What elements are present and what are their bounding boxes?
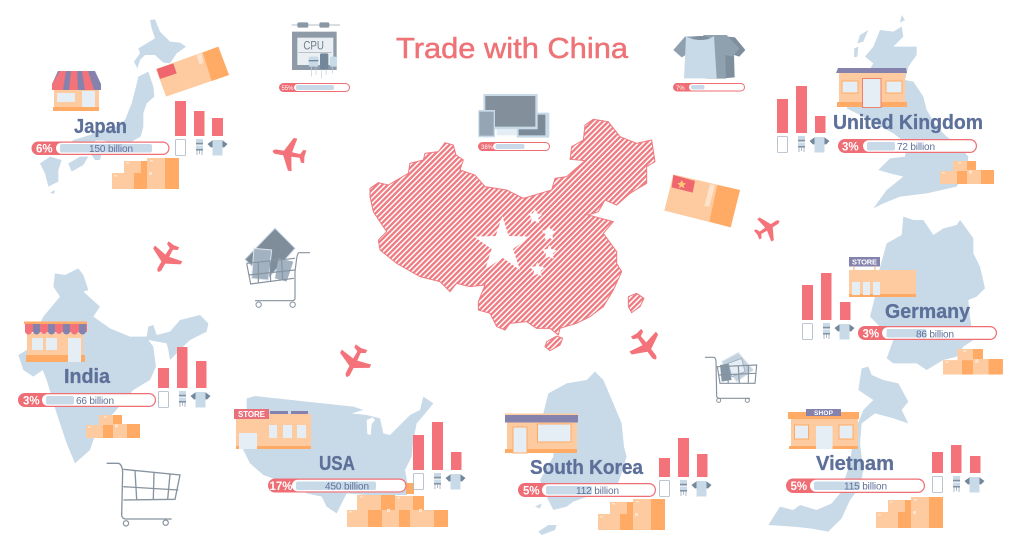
map: UK bbox=[847, 15, 968, 208]
icon: t-shirts bbox=[673, 35, 745, 79]
panel: Germany bbox=[802, 217, 1003, 375]
map: USA bbox=[240, 396, 433, 513]
icon: boxes bbox=[598, 499, 665, 530]
pill: share and value bbox=[268, 478, 406, 493]
icon: CPU: CPU bbox=[303, 38, 324, 52]
map: South Korea bbox=[535, 372, 627, 535]
map: Japan bbox=[40, 19, 186, 194]
bar chart bbox=[175, 101, 228, 156]
icon: small full shopping cart bbox=[705, 353, 757, 402]
pill: share and value: 3% bbox=[842, 142, 859, 154]
pill: share and value bbox=[786, 478, 925, 493]
icon: shop: SHOP bbox=[814, 410, 834, 417]
name: South Korea bbox=[530, 457, 644, 479]
title: Trade with China bbox=[396, 33, 629, 65]
icon: carton with flag bbox=[664, 174, 740, 227]
icon: plane bbox=[270, 135, 308, 173]
pill: share and value: 3% bbox=[862, 328, 879, 340]
icon: shop bbox=[836, 68, 907, 108]
icon: empty shopping cart bbox=[107, 463, 180, 526]
pill: share and value: 150 billion bbox=[89, 144, 133, 155]
panel: United Kingdom bbox=[777, 15, 994, 208]
icon: store: STORE bbox=[852, 258, 877, 266]
panel: USA bbox=[234, 396, 466, 527]
panel: India bbox=[18, 268, 210, 463]
icon: shop bbox=[788, 409, 859, 449]
icon: boxes bbox=[940, 161, 994, 184]
panel: Japan bbox=[32, 19, 229, 194]
icon: boxes bbox=[112, 158, 179, 189]
pill: share and value bbox=[32, 142, 170, 156]
bar chart bbox=[413, 422, 466, 490]
icon: boxes bbox=[86, 415, 140, 438]
pill: apparel share: 7% bbox=[676, 86, 685, 92]
icon: shop bbox=[505, 414, 578, 453]
map: India bbox=[18, 268, 208, 463]
icon: store bbox=[234, 409, 311, 449]
map: China with flag stars bbox=[370, 119, 655, 351]
name: Germany bbox=[885, 301, 971, 323]
icon: boxes bbox=[876, 497, 943, 528]
pill: share and value bbox=[18, 393, 156, 408]
pill: share and value: 115 billion bbox=[844, 482, 887, 492]
icon: full shopping cart bbox=[245, 228, 310, 307]
name: United Kingdom bbox=[833, 112, 983, 134]
icon: plane bbox=[623, 323, 669, 369]
name: Japan bbox=[74, 116, 127, 138]
panel: Vietnam bbox=[768, 367, 984, 532]
bar chart bbox=[777, 86, 830, 152]
pill: electronics share: 38% bbox=[481, 145, 494, 151]
pill: share and value bbox=[838, 139, 977, 154]
pill: electronics share bbox=[478, 142, 550, 151]
pill: share and value: 3% bbox=[23, 396, 40, 408]
bar chart bbox=[932, 445, 984, 492]
icon: store: STORE bbox=[238, 410, 266, 419]
pill: share and value: 6% bbox=[36, 144, 53, 156]
pill: CPU share bbox=[279, 83, 350, 92]
pill: share and value: 72 billion bbox=[897, 142, 935, 153]
name: USA bbox=[319, 453, 355, 475]
bar chart bbox=[659, 438, 712, 496]
icon: monitors bbox=[478, 94, 549, 138]
pill: share and value: 86 billion bbox=[916, 330, 954, 340]
icon: plane bbox=[144, 236, 188, 280]
name: Vietnam bbox=[816, 453, 894, 475]
panel: South Korea bbox=[505, 372, 712, 535]
pill: share and value: 66 billion bbox=[76, 396, 114, 407]
icon: carton with flag bbox=[156, 47, 229, 97]
icon: shop bbox=[52, 71, 101, 111]
icon: plane bbox=[750, 210, 786, 246]
pill: share and value: 450 billion bbox=[325, 482, 369, 492]
icon: shop bbox=[24, 322, 87, 362]
bar chart bbox=[158, 347, 210, 408]
map: Vietnam bbox=[768, 367, 908, 532]
pill: apparel share bbox=[673, 83, 745, 92]
pill: share and value: 112 billion bbox=[576, 486, 619, 497]
pill: share and value: 17% bbox=[270, 481, 293, 493]
pill: share and value: 5% bbox=[523, 486, 540, 498]
icon: boxes bbox=[943, 349, 1003, 375]
name: India bbox=[64, 366, 111, 388]
pill: share and value: 5% bbox=[790, 481, 807, 493]
pill: share and value bbox=[858, 326, 997, 340]
icon: store bbox=[849, 257, 916, 297]
map: Germany bbox=[870, 217, 985, 370]
icon: plane bbox=[332, 340, 376, 384]
pill: CPU share: 55% bbox=[282, 86, 294, 92]
bar chart bbox=[802, 273, 854, 340]
icon: boxes bbox=[347, 483, 448, 527]
icon: CPU bbox=[292, 22, 340, 78]
pill: share and value bbox=[518, 483, 656, 498]
